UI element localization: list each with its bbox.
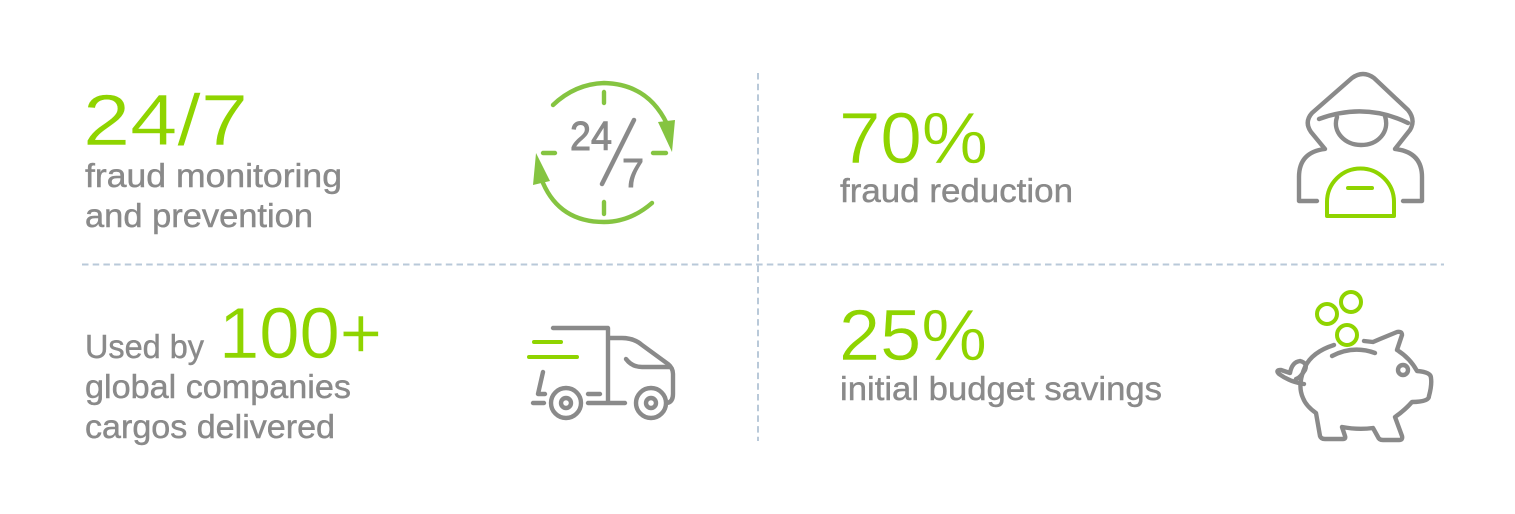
text: fraud reduction: fraud reduction [840,172,1073,209]
text: initial budget savings: initial budget savings [840,370,1162,407]
text: global companies cargos delivered [85,368,351,445]
panel: 24/7 fraud monitoring [83,81,675,234]
text: fraud monitoring and prevention: and prevention [85,197,313,234]
icon: 24/7 clock with arrows [533,83,675,222]
icon: delivery truck [529,328,673,418]
panel: 25% initial budget savings [839,292,1431,440]
heading: 24/7: 24/7 [83,81,248,161]
icon: 24/7 clock with arrows: 7 [622,150,644,196]
panel: 70% fraud reduction [839,74,1422,216]
text: global companies cargos delivered: global companies [85,368,351,405]
icon: piggy bank with coins [1277,292,1431,440]
heading: 25%: 25% [839,296,987,376]
heading: 100+: 100+ [219,294,382,374]
text: global companies cargos delivered: cargos delivered [85,408,335,445]
text: Used by: Used by [85,328,204,365]
icon: 24/7 clock with arrows: 24 [570,113,612,159]
icon: hooded fraudster [1299,74,1422,216]
panel: used by 100+ global companies [85,294,673,445]
text: fraud monitoring and prevention [85,157,342,234]
heading: 70%: 70% [839,99,988,179]
text: fraud monitoring and prevention: fraud monitoring [85,157,342,194]
